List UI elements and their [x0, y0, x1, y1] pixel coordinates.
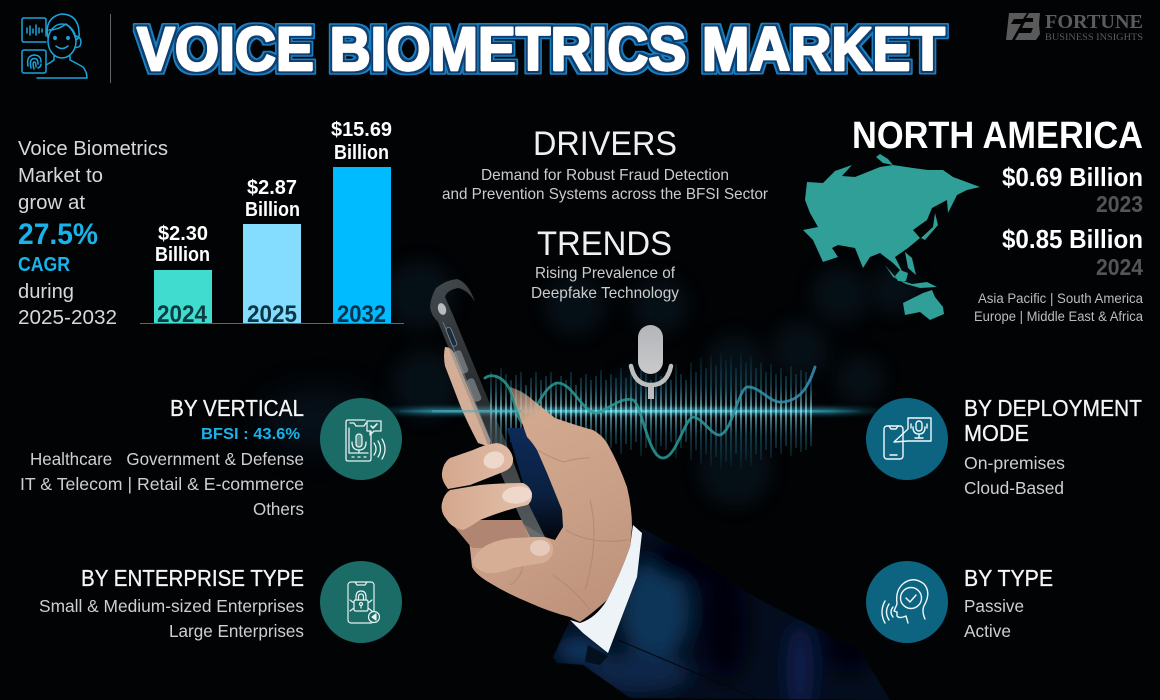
- voice sine wave: [485, 367, 815, 458]
- map: Asia Pacific: [803, 154, 980, 320]
- regional stats: North America: [852, 115, 1143, 324]
- panel: by vertical: IT & Telecom | Retail & E-commerce: [20, 474, 304, 494]
- panel: by vertical: Healthcare Government & Defense: [30, 449, 304, 469]
- CAGR text block: grow at: [18, 192, 85, 214]
- drivers: Demand for Robust Fraud Detection: [481, 167, 729, 184]
- middle finger: [442, 483, 532, 530]
- suit sleeve: [553, 527, 890, 700]
- logo: Fortune Business Insights: BUSINESS INSIGHTS: [1045, 33, 1143, 43]
- regional stats: North America: $0.69 Billion: [1002, 162, 1143, 192]
- middle fingernail: [501, 485, 533, 505]
- lower finger: [472, 537, 553, 573]
- panel: by enterprise type: Large Enterprises: [169, 621, 304, 641]
- bar 2024: [154, 223, 212, 328]
- CAGR text block: 2025-2032: [18, 307, 117, 329]
- title: VOICE BIOMETRICS MARKET: [137, 15, 945, 83]
- bar 2024: 2024: [157, 301, 208, 328]
- CAGR text block: CAGR: [18, 254, 70, 276]
- drivers: [442, 125, 769, 203]
- header divider: [110, 14, 111, 83]
- panel: by deployment mode: [964, 395, 1142, 498]
- phone: [430, 279, 545, 537]
- icon: phone and voice bubble: [866, 398, 948, 480]
- icon: phone with microphone: [320, 398, 402, 480]
- CAGR text block: Voice Biometrics: [18, 138, 168, 160]
- bar 2032: [331, 119, 392, 328]
- panel: by deployment mode: MODE: [964, 420, 1029, 446]
- bar 2032: 2032: [337, 301, 386, 328]
- panel: by vertical: BFSI : 43.6%: [201, 426, 300, 443]
- regional stats: North America: Asia Pacific | South America: [978, 291, 1143, 306]
- drivers: and Prevention Systems across the BFSI Sector: [442, 186, 769, 203]
- logo: Fortune Business Insights: FORTUNE: [1045, 11, 1143, 33]
- upper fingernail: [482, 449, 506, 471]
- panel: by enterprise type: Small & Medium-sized Enterprises: [39, 596, 304, 616]
- drivers: DRIVERS: [533, 125, 677, 163]
- panel: by deployment mode: On-premises: [964, 453, 1065, 473]
- icon: microphone: [631, 325, 671, 399]
- icon: phone with padlock: [320, 561, 402, 643]
- trends: [531, 225, 679, 302]
- bar 2025: Billion: [245, 199, 300, 221]
- panel: by enterprise type: BY ENTERPRISE TYPE: [81, 565, 304, 591]
- bar 2032: Billion: [334, 142, 389, 164]
- web between fingers: [447, 518, 530, 548]
- trends: TRENDS: [537, 225, 672, 263]
- bar 2025: [243, 177, 301, 328]
- panel: by deployment mode: BY DEPLOYMENT: [964, 395, 1142, 421]
- bar chart: market size: [140, 119, 404, 328]
- header icon: person with voice and fingerprint: [22, 14, 87, 78]
- logo: Fortune Business Insights: [1006, 11, 1143, 43]
- bar 2024: $2.30: [158, 223, 208, 245]
- trends: Deepfake Technology: [531, 285, 679, 302]
- CAGR text block: during: [18, 281, 74, 303]
- bar 2025: 2025: [247, 301, 297, 328]
- regional stats: North America: 2024: [1096, 254, 1143, 280]
- bar 2032: $15.69: [331, 119, 392, 141]
- panel: by enterprise type: [39, 565, 304, 641]
- panel: by vertical: Others: [253, 499, 304, 519]
- panel: by vertical: BY VERTICAL: [170, 395, 304, 421]
- panel: by type: Active: [964, 621, 1011, 641]
- CAGR text block: 27.5%: [18, 218, 98, 251]
- upper finger: [442, 443, 513, 489]
- index finger: [444, 347, 490, 447]
- bar 2025: $2.87: [247, 177, 297, 199]
- white shirt cuff: [570, 525, 642, 653]
- regional stats: North America: 2023: [1096, 191, 1143, 217]
- panel: by type: BY TYPE: [964, 565, 1053, 591]
- regional stats: North America: $0.85 Billion: [1002, 224, 1143, 254]
- icon: head with speech waves: [866, 561, 948, 643]
- panel: by vertical: [20, 395, 304, 519]
- panel: by type: Passive: [964, 596, 1024, 616]
- line over hand: [432, 410, 522, 412]
- palm creases: [510, 450, 628, 610]
- CAGR text block: [18, 138, 168, 329]
- voice waveform line: [380, 352, 880, 470]
- shadow gap behind phone: [507, 428, 563, 540]
- trends: Rising Prevalence of: [535, 265, 676, 282]
- lower fingernail: [530, 540, 550, 556]
- palm and thumb: [468, 387, 632, 622]
- panel: by type: [964, 565, 1053, 641]
- photo: hand holding phone: [430, 279, 900, 700]
- regional stats: North America: Europe | Middle East & Africa: [974, 309, 1143, 324]
- bar 2024: Billion: [155, 244, 210, 266]
- CAGR text block: Market to: [18, 165, 103, 187]
- panel: by deployment mode: Cloud-Based: [964, 478, 1064, 498]
